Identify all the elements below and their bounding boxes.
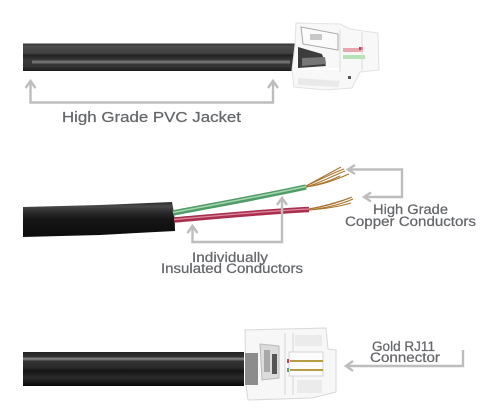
panel: RJ11 connector cable (23, 328, 336, 400)
flat black cable (23, 44, 296, 71)
red conductor (174, 210, 309, 220)
panel: PVC jacket cable (23, 23, 379, 90)
arrow: insulation bracket (188, 198, 287, 242)
panel: stripped cable with conductors (23, 167, 353, 237)
label: gold connector: Gold RJ11 (372, 339, 435, 354)
label: insulated conductors line 2: Insulated Conductors (161, 261, 303, 276)
icon: clear RJ11 plug, top view (245, 328, 336, 400)
label: jacket: High Grade PVC Jacket (62, 110, 241, 126)
label: copper conductors line 2: Copper Conductors (345, 214, 476, 229)
icon: clear RJ11 plug, side view (292, 23, 379, 90)
green conductor (173, 187, 306, 213)
copper strands, upper (306, 167, 349, 187)
arrow: copper bracket (348, 165, 402, 202)
label: copper conductors: High Grade (373, 202, 448, 217)
black cable with highlight (23, 352, 244, 386)
arrow: jacket bracket (26, 81, 278, 102)
copper strands, lower (309, 197, 353, 210)
round black cable (23, 202, 175, 237)
label: gold connector line 2: Connector (370, 350, 441, 365)
label: insulated conductors: Individually (192, 250, 268, 265)
arrow: connector callout (346, 350, 463, 371)
